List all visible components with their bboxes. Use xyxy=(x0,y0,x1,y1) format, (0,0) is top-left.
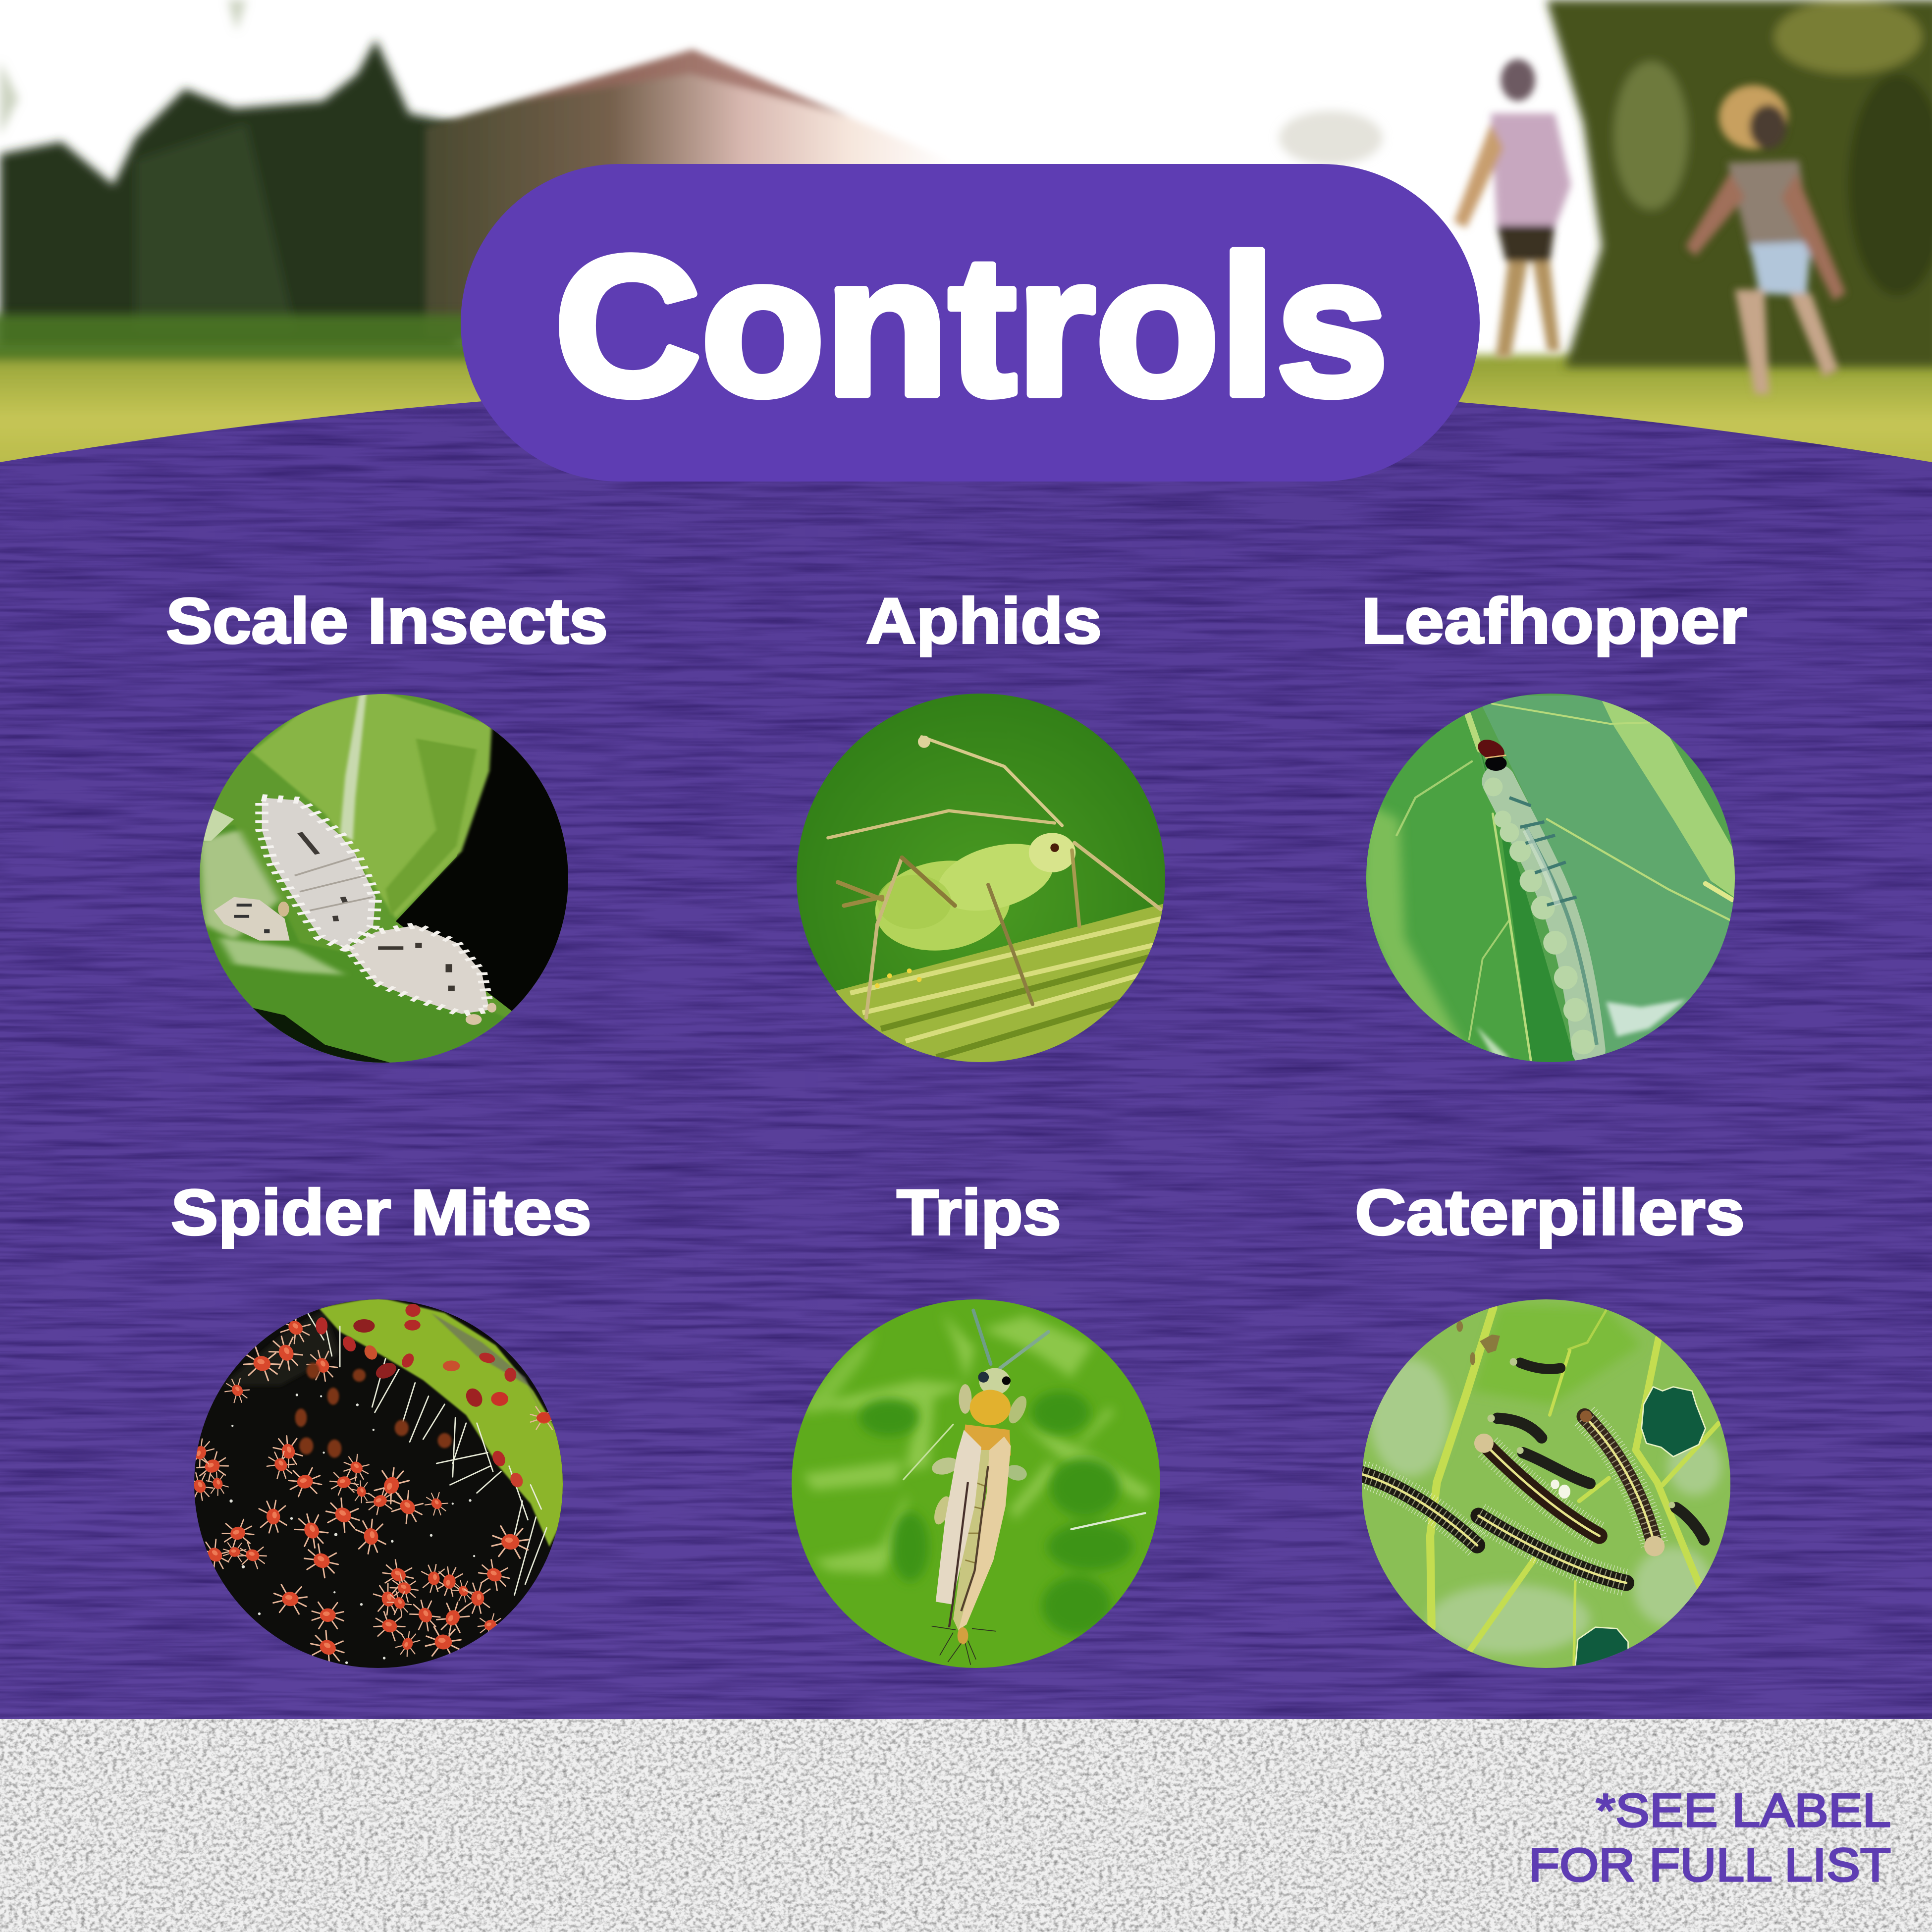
white specks on web xyxy=(229,1394,475,1664)
small dark caterpillars xyxy=(1498,1363,1704,1540)
plant stem xyxy=(832,902,1171,1072)
heading: Spider Mites: Spider Mites xyxy=(171,1176,591,1248)
photo circle: aphid xyxy=(789,684,1177,1072)
photo circle: thrips xyxy=(768,1278,1189,1699)
dark red mites on the leaf xyxy=(316,1304,551,1489)
footnote text: *SEE LABEL xyxy=(1596,1784,1891,1837)
heading: Trips: Trips xyxy=(897,1176,1061,1248)
stray bristles xyxy=(904,1424,1145,1529)
aphid legs and antennae xyxy=(828,736,1161,1018)
insect: rounded mealybug xyxy=(348,925,489,1014)
child figure right xyxy=(1685,85,1846,394)
footnote text: FOR FULL LIST xyxy=(1529,1839,1891,1891)
title pill xyxy=(461,164,1480,482)
caterpillar body xyxy=(1475,736,1597,1054)
bottom white textured wall xyxy=(0,1719,1932,1932)
footnote text xyxy=(1529,1784,1891,1891)
out of focus mites xyxy=(295,1363,452,1458)
background photo: backyard with children running xyxy=(0,0,1932,493)
title text: Controls xyxy=(554,215,1389,436)
caterpillar heads xyxy=(1474,1410,1664,1556)
left tree line xyxy=(0,0,456,351)
purple panel with textured arc top xyxy=(0,381,1932,1719)
leaf hairs xyxy=(308,1313,547,1595)
house xyxy=(425,49,955,339)
caterpillar head xyxy=(1475,736,1507,771)
photo circle: caterpillars on leaf xyxy=(1338,1278,1759,1699)
heading: Leafhopper: Leafhopper xyxy=(1361,585,1747,657)
photo circle: leaf caterpillar xyxy=(1338,669,1759,1090)
heading: Aphids: Aphids xyxy=(866,585,1102,657)
large hairy caterpillars xyxy=(1362,1416,1655,1583)
heading: Caterpillers: Caterpillers xyxy=(1355,1176,1745,1248)
lawn and hedge xyxy=(0,314,1932,493)
heading: Scale Insects: Scale Insects xyxy=(166,585,608,657)
spider mite swarm xyxy=(183,1309,557,1668)
photo circle: scale insects xyxy=(200,694,568,1063)
photo circle: spider mites xyxy=(173,1278,594,1699)
aphid body xyxy=(869,832,1075,959)
leaf veins xyxy=(1430,1308,1719,1665)
child figure left xyxy=(1454,59,1571,357)
leaf holes xyxy=(1575,1387,1706,1670)
insect: small mealybug xyxy=(214,897,290,941)
right trees xyxy=(1279,0,1932,367)
insect: large elongated mealybug xyxy=(262,798,376,948)
thrips insect xyxy=(930,1310,1048,1665)
green leaf edge xyxy=(319,1297,565,1547)
leaf veins xyxy=(1396,703,1732,1061)
